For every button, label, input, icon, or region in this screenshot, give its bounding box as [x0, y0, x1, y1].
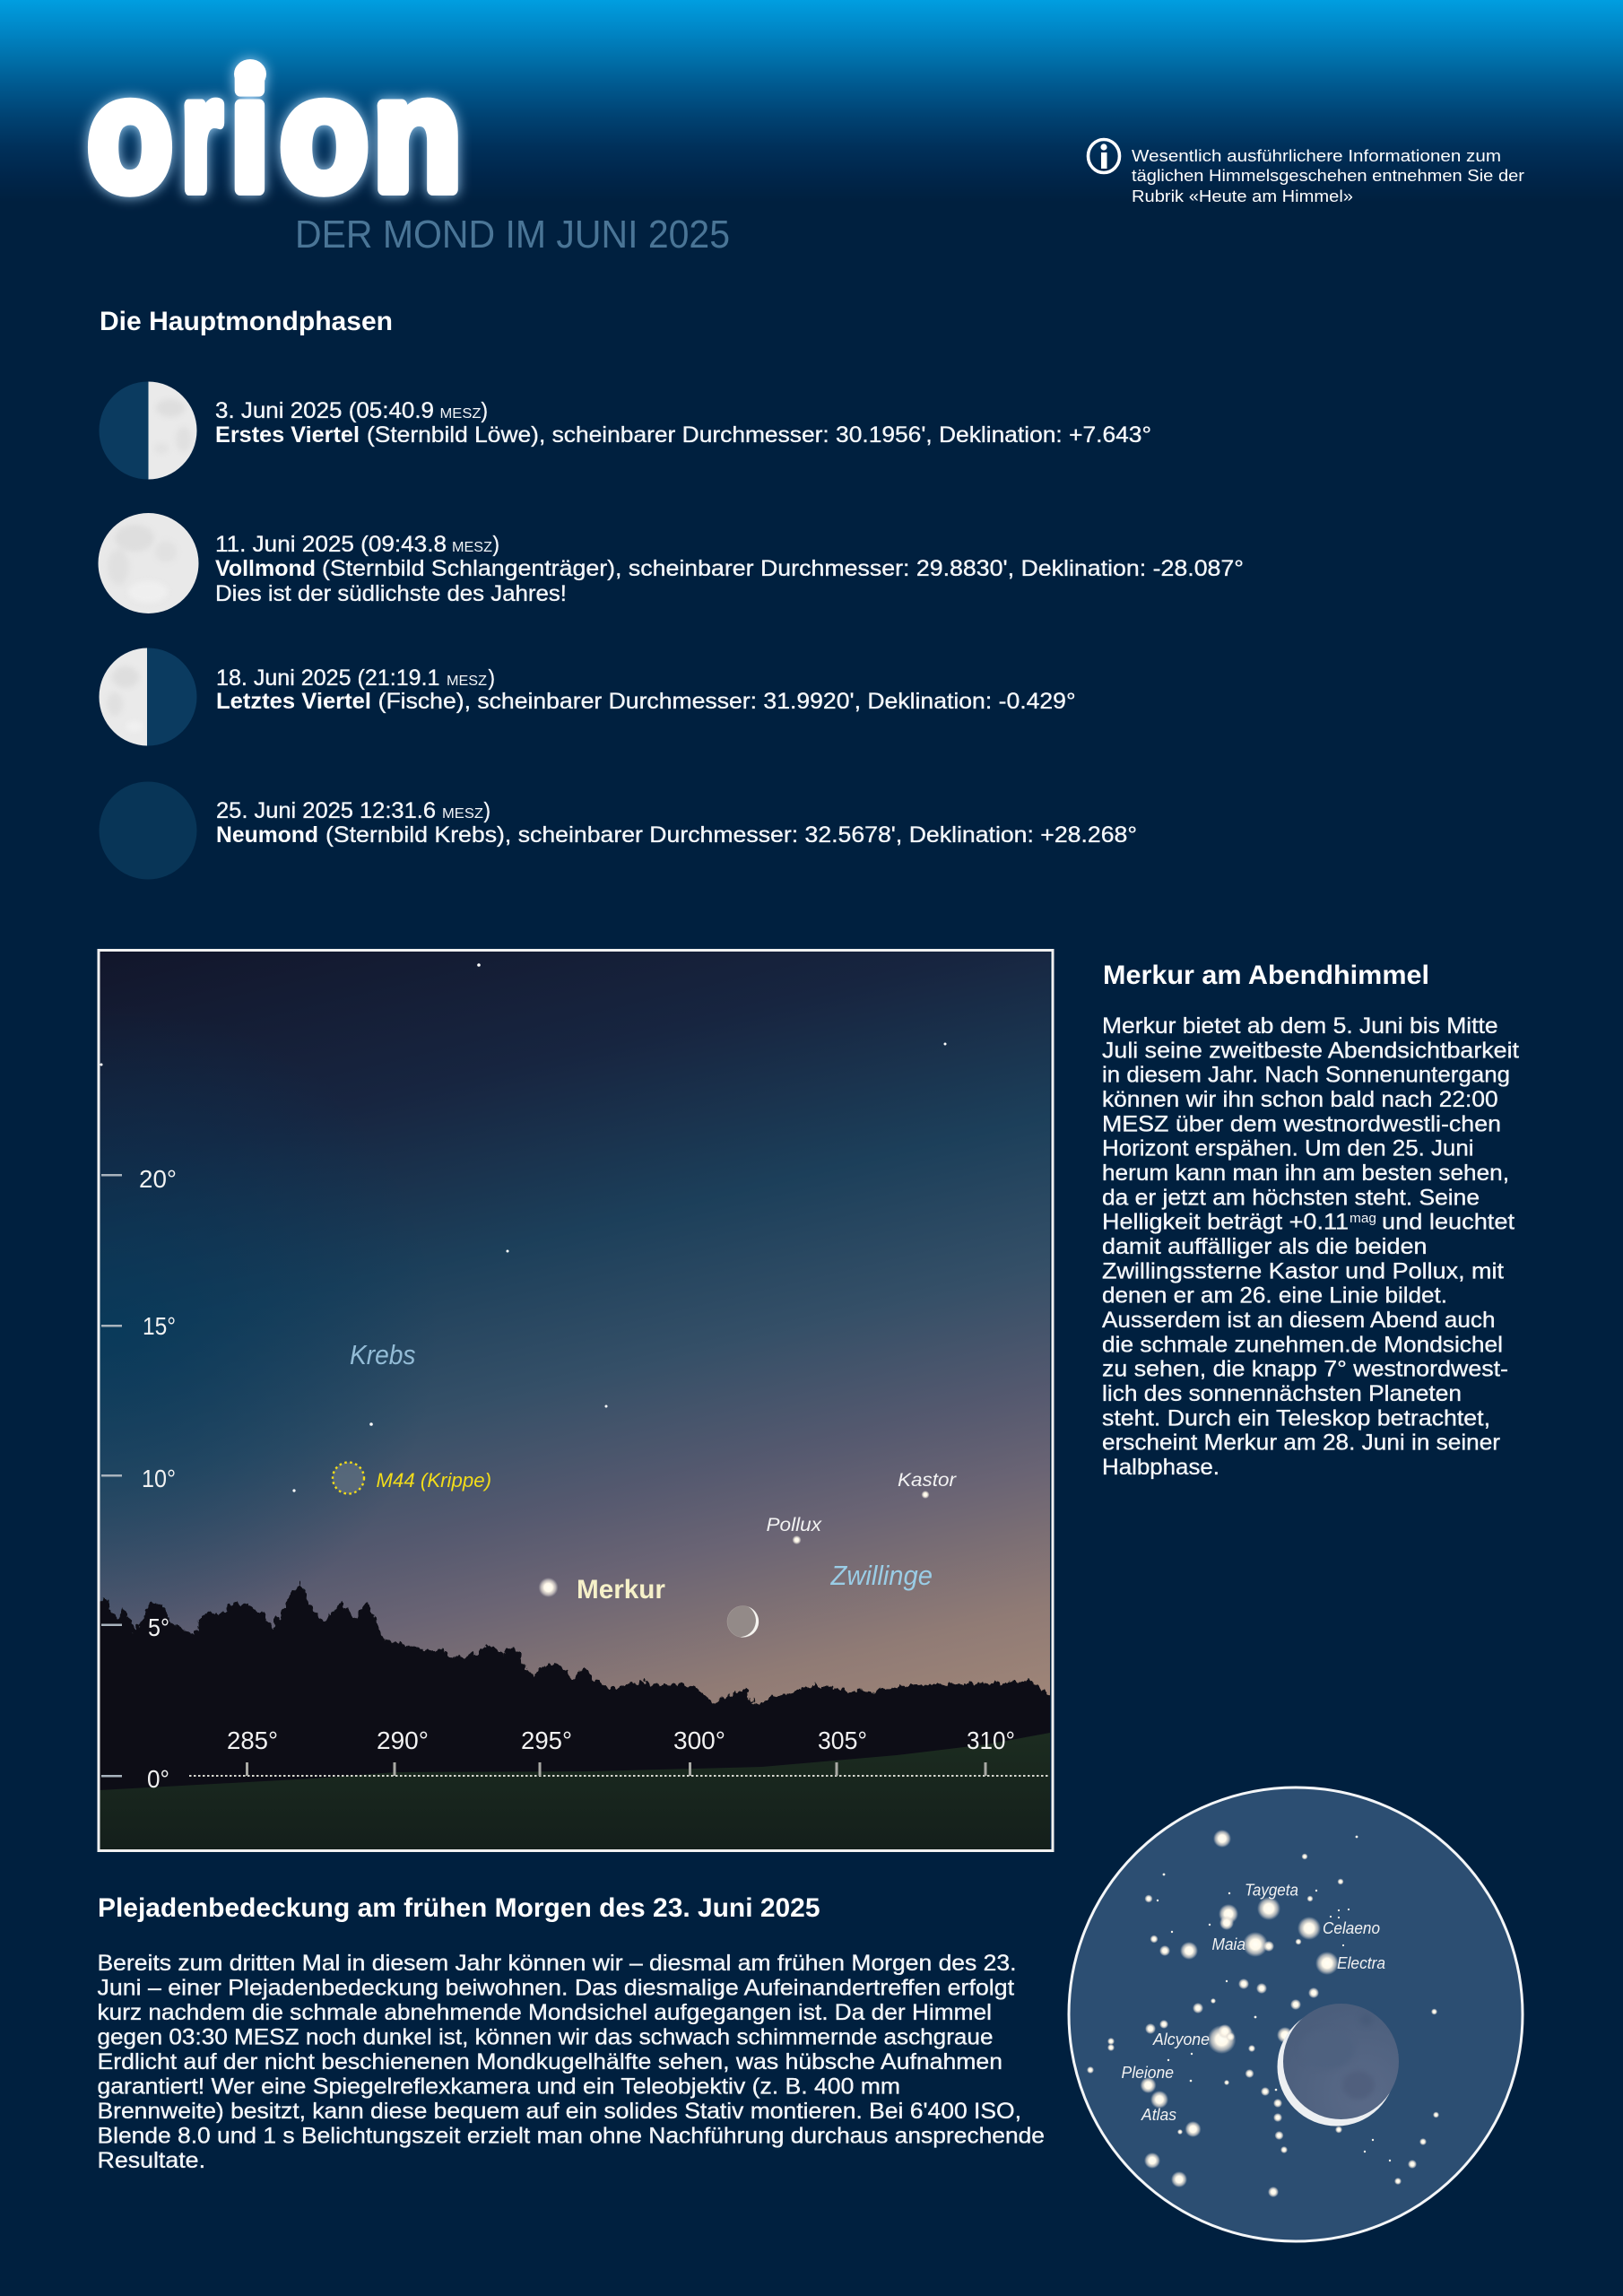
- logo: orion: o: [281, 46, 368, 223]
- subtitle: DER MOND IM JUNI 2025: [295, 213, 730, 257]
- text: last quarter: Letztes Viertel: [216, 689, 371, 714]
- text: Merkur am Abendhimmel: Halbphase.: [1102, 1455, 1219, 1480]
- marker: M44: [333, 1462, 491, 1494]
- crescent moon: [727, 1605, 759, 1638]
- moon: new: [99, 782, 197, 879]
- text: full moon: MESZ: [452, 540, 492, 555]
- moon: last quarter: [99, 648, 197, 746]
- info text: Wesentlich ausführlichere Informationen zum: [1132, 146, 1501, 165]
- text: Merkur am Abendhimmel: können wir ihn schon bald nach 22:00: [1102, 1087, 1498, 1112]
- text: Merkur am Abendhimmel: Merkur am Abendhimmel: [1103, 961, 1429, 990]
- constellation label: Zwillinge: Zwillinge: [830, 1560, 933, 1591]
- text: new moon: Neumond: [216, 822, 318, 848]
- star labels: Alcyone: [1152, 2030, 1210, 2048]
- text: Merkur am Abendhimmel: zu sehen, die knapp 7° westnordwest-: [1102, 1357, 1508, 1382]
- azimuth axis: 290°: [377, 1726, 429, 1754]
- text: first quarter: (Sternbild Löwe), scheinbarer Durchmesser: 30.1956', Deklination: +7.643°: [367, 422, 1151, 448]
- text: Merkur am Abendhimmel: denen er am 26. eine Linie bildet.: [1102, 1283, 1447, 1309]
- altitude axis: 10°: [142, 1465, 176, 1492]
- stars: [1087, 1830, 1439, 2197]
- text: first quarter: 3. Juni 2025 (05:40.9: [215, 398, 434, 423]
- logo: orion: [88, 46, 461, 223]
- text: new moon: [216, 798, 1137, 848]
- text: Merkur am Abendhimmel: herum kann man ihn am besten sehen,: [1102, 1161, 1509, 1186]
- azimuth axis: [189, 1726, 1049, 1776]
- star: Kastor: Kastor: [898, 1470, 957, 1491]
- text: Merkur am Abendhimmel: mag: [1350, 1211, 1376, 1226]
- text: Merkur am Abendhimmel: erscheint Merkur am 28. Juni in seiner: [1102, 1431, 1500, 1456]
- text: full moon: (Sternbild Schlangenträger), scheinbarer Durchmesser: 29.8830', Deklination: -28.087°: [322, 556, 1244, 581]
- star: Pollux: [766, 1515, 823, 1544]
- text: Merkur am Abendhimmel: in diesem Jahr. Nach Sonnenuntergang: [1102, 1063, 1510, 1088]
- text: Plejadenbedeckung: Plejadenbedeckung am frühen Morgen des 23. Juni 2025: [98, 1893, 820, 1923]
- text: full moon: 11. Juni 2025 (09:43.8: [215, 532, 447, 557]
- logo: orion: r: [181, 46, 221, 223]
- text: Merkur am Abendhimmel: Helligkeit beträgt +0.11: [1102, 1210, 1349, 1235]
- star: Pollux: Pollux: [766, 1515, 823, 1535]
- text: new moon: (Sternbild Krebs), scheinbarer Durchmesser: 32.5678', Deklination: +28.268°: [325, 822, 1137, 848]
- text: last quarter: [216, 665, 1076, 714]
- text: Plejadenbedeckung: Juni – einer Plejadenbedeckung beiwohnen. Das diesmalige Aufeinandertreffen erfolgt: [97, 1975, 1014, 2000]
- star labels: Maia: [1212, 1935, 1245, 1953]
- text: full moon: Dies ist der südlichste des Jahres!: [215, 581, 567, 606]
- text: Plejadenbedeckung: [97, 1893, 1045, 2173]
- text: Plejadenbedeckung: Bereits zum dritten Mal in diesem Jahr können wir – diesmal am frühen Morgen des 23.: [97, 1951, 1017, 1976]
- text: new moon: MESZ: [442, 806, 483, 822]
- altitude axis: 15°: [143, 1312, 176, 1340]
- altitude axis: [101, 1165, 177, 1793]
- heading: Die Hauptmondphasen: Die Hauptmondphasen: [100, 307, 393, 336]
- info text: Rubrik «Heute am Himmel»: [1132, 187, 1353, 205]
- star labels: Atlas: [1141, 2105, 1176, 2124]
- frame: [99, 951, 1053, 1851]
- text: Plejadenbedeckung: Blende 8.0 und 1 s Belichtungszeit erzielt man ohne Nachführung durchaus ansprechende: [97, 2124, 1045, 2149]
- text: last quarter: ): [488, 665, 495, 691]
- logo: orion: o: [88, 46, 172, 223]
- moon: first quarter: [99, 382, 197, 479]
- text: full moon: ): [493, 532, 499, 557]
- info text: täglichen Himmelsgeschehen entnehmen Sie der: [1132, 166, 1524, 185]
- meadow: [100, 1733, 1050, 1849]
- star labels: [1121, 1880, 1385, 2124]
- altitude axis: 5°: [148, 1613, 169, 1641]
- text: Merkur am Abendhimmel: MESZ über dem westnordwestli-chen: [1102, 1111, 1501, 1136]
- icon: info: [1089, 140, 1119, 172]
- info note: [1089, 140, 1524, 205]
- chart: Pleiades occultation circle: [1069, 1787, 1523, 2241]
- text: Plejadenbedeckung: Resultate.: [97, 2148, 205, 2173]
- text: new moon: ): [484, 798, 490, 823]
- text: first quarter: MESZ: [439, 406, 482, 422]
- text: Merkur am Abendhimmel: Zwillingssterne Kastor und Pollux, mit: [1102, 1258, 1504, 1283]
- text: Merkur am Abendhimmel: [1102, 961, 1519, 1480]
- tiny stars: [1157, 1836, 1399, 2161]
- marker: M44: M44 (Krippe): [377, 1469, 491, 1492]
- text: Merkur am Abendhimmel: steht. Durch ein Teleskop betrachtet,: [1102, 1405, 1490, 1431]
- tree line: [90, 1582, 1058, 1803]
- star labels: Taygeta: [1245, 1880, 1298, 1900]
- text: Merkur am Abendhimmel: damit auffälliger als die beiden: [1102, 1234, 1428, 1259]
- text: first quarter: ): [481, 398, 488, 423]
- text: Plejadenbedeckung: kurz nachdem die schmale abnehmende Mondsichel aufgegangen ist. Da der Himmel: [97, 2000, 992, 2025]
- azimuth axis: 285°: [227, 1726, 278, 1754]
- text: full moon: Vollmond: [215, 556, 316, 581]
- constellation label: Krebs: Krebs: [350, 1339, 416, 1370]
- text: Merkur am Abendhimmel: da er jetzt am höchsten steht. Seine: [1102, 1185, 1480, 1210]
- text: Plejadenbedeckung: garantiert! Wer eine Spiegelreflexkamera und ein Teleobjektiv (z. B. 400 mm: [97, 2074, 900, 2099]
- star labels: Celaeno: [1323, 1918, 1380, 1937]
- text: last quarter: (Fische), scheinbarer Durchmesser: 31.9920', Deklination: -0.429°: [378, 689, 1076, 714]
- text: first quarter: [215, 398, 1151, 448]
- star labels: Pleione: [1121, 2063, 1174, 2082]
- text: Plejadenbedeckung: gegen 03:30 MESZ noch dunkel ist, können wir das schwach schimmernde aschgraue: [97, 2025, 994, 2050]
- text: last quarter: 18. Juni 2025 (21:19.1: [216, 665, 439, 691]
- logo: orion: n: [373, 46, 461, 223]
- azimuth axis: 305°: [818, 1726, 867, 1754]
- planet: Merkur: Merkur: [577, 1575, 665, 1605]
- text: Plejadenbedeckung: Brennweite) besitzt, kann diese bequem auf ein solides Stativ montieren. Bei 6'400 ISO,: [97, 2099, 1021, 2124]
- info text: [1132, 146, 1524, 205]
- text: last quarter: MESZ: [447, 674, 487, 689]
- text: Merkur am Abendhimmel: Merkur bietet ab dem 5. Juni bis Mitte: [1102, 1013, 1498, 1039]
- chart: evening sky with Merkur: [90, 951, 1058, 1851]
- text: Merkur am Abendhimmel: lich des sonnennächsten Planeten: [1102, 1381, 1462, 1406]
- azimuth axis: 295°: [521, 1726, 572, 1754]
- star labels: Electra: [1337, 1953, 1385, 1972]
- text: full moon: [215, 532, 1244, 606]
- text: Merkur am Abendhimmel: die schmale zunehmen.de Mondsichel: [1102, 1332, 1503, 1357]
- logo: orion: i: [230, 46, 269, 223]
- text: Merkur am Abendhimmel: Horizont erspähen. Um den 25. Juni: [1102, 1136, 1474, 1161]
- altitude axis: 0°: [147, 1765, 169, 1793]
- moon: full: [99, 513, 199, 613]
- text: Merkur am Abendhimmel: und leuchtet: [1382, 1210, 1515, 1235]
- text: new moon: 25. Juni 2025 12:31.6: [216, 798, 436, 823]
- panel: moon phases: [99, 382, 1244, 879]
- faint stars: [100, 963, 947, 1492]
- planet: Merkur: [538, 1575, 665, 1605]
- altitude axis: 20°: [139, 1165, 177, 1193]
- azimuth axis: 310°: [967, 1726, 1015, 1754]
- text: Merkur am Abendhimmel: Ausserdem ist an diesem Abend auch: [1102, 1308, 1496, 1333]
- star: Kastor: [898, 1470, 957, 1499]
- moon with earthshine: [1277, 2004, 1399, 2126]
- text: first quarter: Erstes Viertel: [215, 422, 360, 448]
- text: Merkur am Abendhimmel: Juli seine zweitbeste Abendsichtbarkeit: [1102, 1038, 1519, 1063]
- azimuth axis: 300°: [673, 1726, 725, 1754]
- text: Plejadenbedeckung: Erdlicht auf der nicht beschienenen Mondkugelhälfte sehen, was hübsche Aufnahmen: [97, 2049, 1002, 2074]
